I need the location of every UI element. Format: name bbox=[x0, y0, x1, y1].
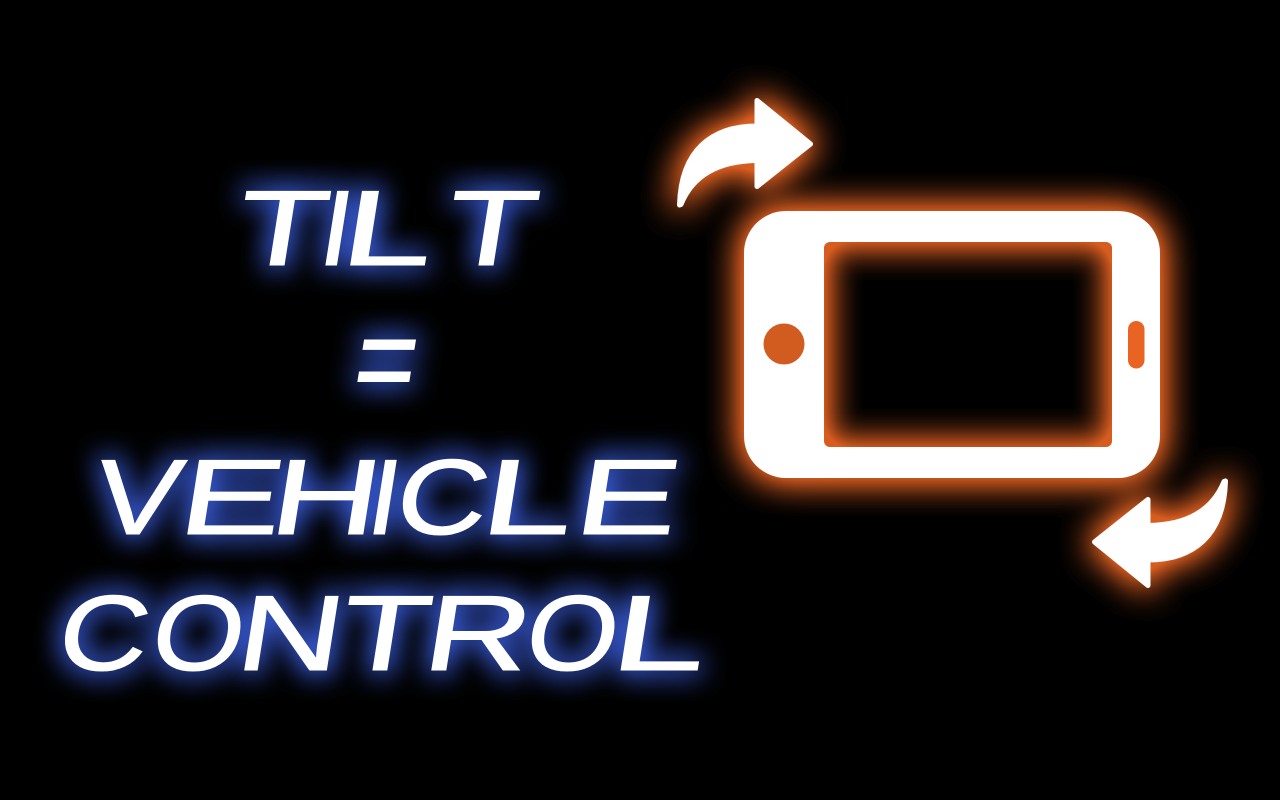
heading line: TILT: T bbox=[228, 169, 337, 288]
heading line: VEHICLE: E bbox=[568, 438, 689, 557]
icon: speaker slot bbox=[1128, 321, 1144, 368]
arrow: top rotation arrow bbox=[680, 100, 810, 205]
heading line: TILT: T bbox=[437, 169, 546, 288]
icon: home button bbox=[764, 324, 804, 364]
heading line: VEHICLE: H bbox=[263, 437, 390, 557]
heading line: VEHICLE: L bbox=[474, 437, 585, 557]
heading line: TILT: I bbox=[312, 169, 362, 288]
heading line: CONTROL: R bbox=[416, 574, 541, 693]
heading line: VEHICLE: C bbox=[388, 438, 498, 557]
heading line: TILT: L bbox=[334, 168, 445, 288]
heading line: CONTROL bbox=[50, 574, 718, 693]
icon: phone body with screen cut-out bbox=[744, 211, 1160, 478]
arrow: bottom rotation arrow bbox=[1094, 481, 1226, 586]
heading line: VEHICLE: E bbox=[172, 438, 293, 557]
heading line: CONTROL: N bbox=[229, 574, 353, 693]
icon: tilting phone with rotation arrows bbox=[680, 100, 1226, 586]
heading line: CONTROL: O bbox=[144, 574, 254, 693]
heading line: equals sign: = bbox=[345, 288, 429, 431]
title: tilt = vehicle control bbox=[50, 168, 718, 693]
heading line: VEHICLE: V bbox=[86, 438, 192, 557]
heading line: VEHICLE: I bbox=[360, 438, 410, 557]
heading line: CONTROL: T bbox=[332, 574, 440, 693]
heading line: CONTROL: C bbox=[50, 574, 159, 693]
heading line: TILT bbox=[228, 168, 546, 288]
heading line: CONTROL: O bbox=[518, 574, 628, 693]
heading line: CONTROL: L bbox=[604, 574, 718, 693]
heading line: VEHICLE bbox=[86, 437, 689, 557]
